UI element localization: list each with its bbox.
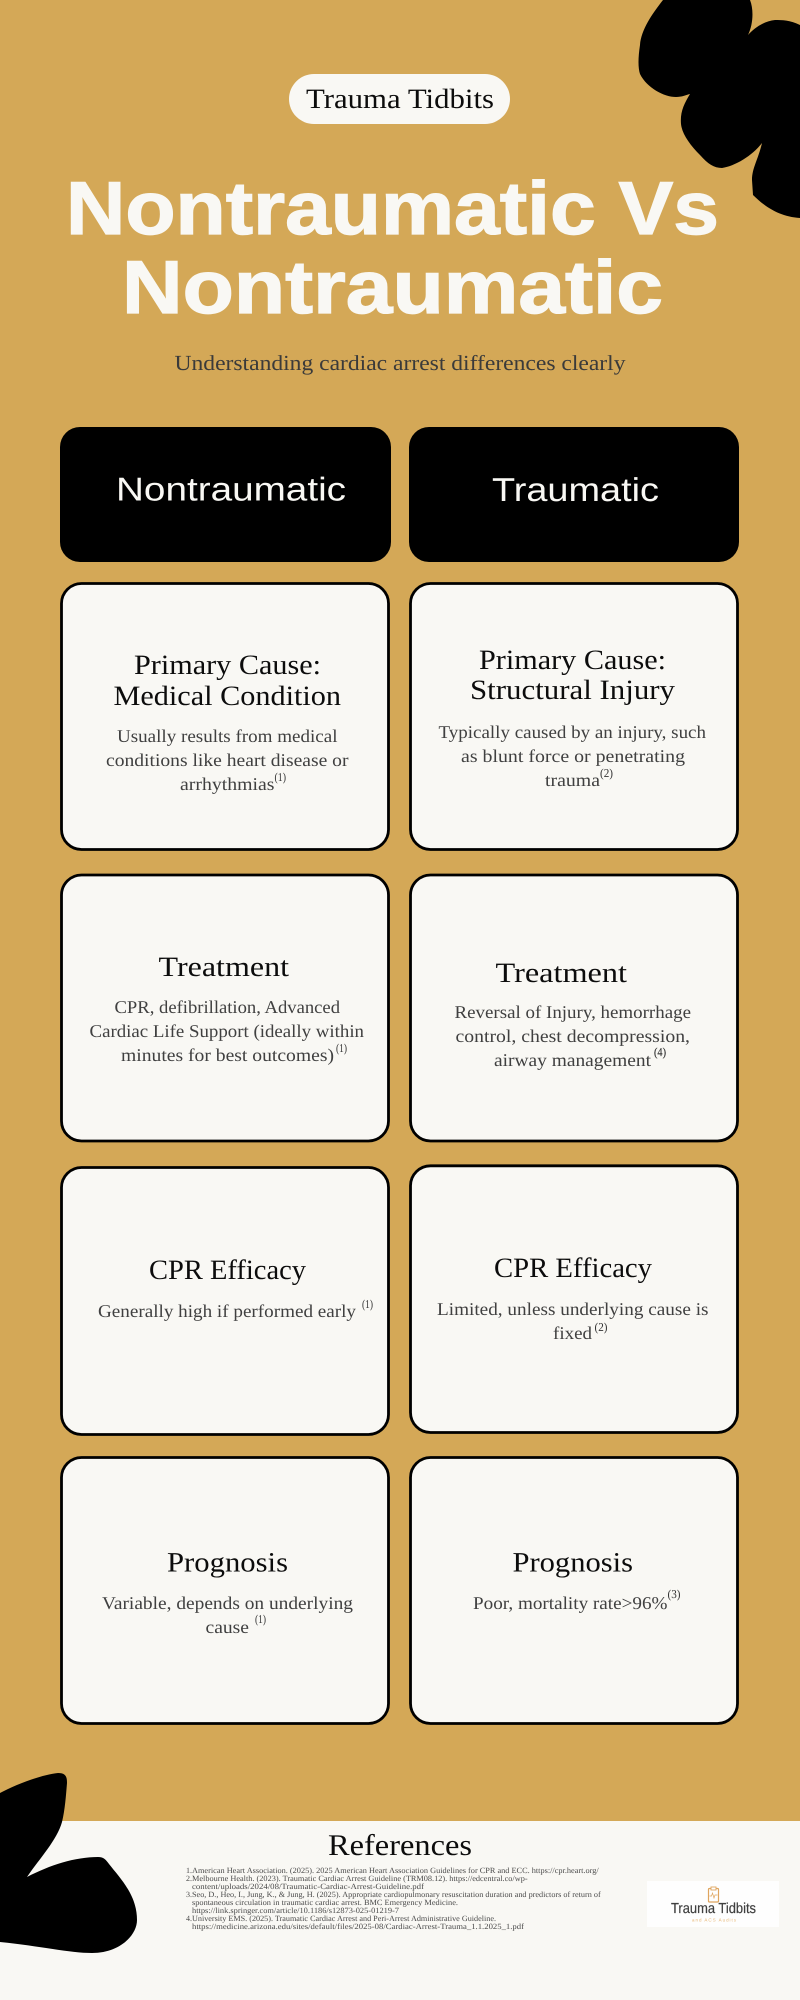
card: prognosis, nontraumatic: Prognosis	[167, 1548, 288, 1578]
title	[66, 166, 719, 329]
column header: Traumatic: Traumatic	[492, 471, 659, 508]
logo: Trauma Tidbits	[647, 1881, 779, 1927]
card: prognosis, traumatic: Prognosis	[512, 1548, 633, 1578]
card: prognosis, traumatic: Poor, mortality rate>96%	[473, 1593, 668, 1613]
card: treatment, traumatic: (4)	[654, 1045, 666, 1059]
card: CPR efficacy, traumatic: CPR Efficacy	[494, 1253, 652, 1284]
card: primary cause, nontraumatic: (1)	[274, 770, 286, 784]
card: primary cause, traumatic: Typically caused by an injury, such	[438, 722, 706, 742]
card: treatment, traumatic	[410, 875, 738, 1141]
card: treatment, traumatic: airway management	[494, 1050, 651, 1070]
card: primary cause, nontraumatic: Medical Condition	[114, 681, 341, 712]
card: treatment, nontraumatic: CPR, defibrillation, Advanced	[114, 997, 340, 1017]
decorative blob: bottom left	[0, 1773, 137, 1953]
card: CPR efficacy, nontraumatic: CPR Efficacy	[149, 1255, 306, 1286]
card: primary cause, traumatic: as blunt force or penetrating	[461, 746, 685, 766]
card: treatment, nontraumatic: minutes for best outcomes)	[121, 1045, 334, 1065]
logo: Trauma Tidbits: Trauma Tidbits	[671, 1901, 756, 1917]
card: prognosis, traumatic	[410, 1458, 738, 1724]
card: CPR efficacy, traumatic: fixed	[553, 1323, 592, 1343]
logo: Trauma Tidbits: and ACS Audits	[692, 1918, 737, 1922]
card: CPR efficacy, nontraumatic: (1)	[362, 1297, 373, 1311]
card: primary cause, traumatic: Structural Injury	[470, 675, 675, 706]
references list: spontaneous circulation in traumatic cardiac arrest. BMC Emergency Medicine.	[192, 1898, 458, 1907]
card: prognosis, traumatic: (3)	[668, 1587, 680, 1601]
card: prognosis, nontraumatic: cause	[206, 1617, 249, 1637]
card: CPR efficacy, nontraumatic	[62, 1168, 388, 1434]
card: CPR efficacy, traumatic: (2)	[594, 1320, 608, 1334]
references heading: References	[328, 1829, 472, 1862]
column header: Traumatic	[409, 427, 739, 562]
card: primary cause, traumatic: (2)	[600, 766, 613, 780]
card: treatment, nontraumatic: Cardiac Life Support (ideally within	[90, 1021, 364, 1041]
column header: Nontraumatic: Nontraumatic	[116, 470, 346, 508]
decorative blob: top right	[638, 0, 800, 218]
card: primary cause, nontraumatic: Usually results from medical	[117, 726, 338, 746]
references panel background	[0, 1821, 800, 2000]
references list: Seo, D., Heo, I., Jung, K., & Jung, H. (2025). Appropriate cardiopulmonary resuscitation duration and predictors of return of	[192, 1890, 601, 1899]
card: treatment, nontraumatic: Treatment	[158, 952, 289, 983]
badge: Trauma Tidbits	[289, 74, 510, 124]
references list: https://link.springer.com/article/10.1186/s12873-025-01219-7	[192, 1906, 399, 1915]
card: CPR efficacy, traumatic	[410, 1166, 738, 1432]
card: prognosis, nontraumatic	[62, 1458, 388, 1724]
card: primary cause, traumatic	[410, 584, 738, 850]
card: prognosis, nontraumatic: (1)	[255, 1612, 266, 1626]
card: primary cause, traumatic: trauma	[545, 770, 600, 790]
references list: American Heart Association. (2025). 2025 American Heart Association Guidelines for CPR and ECC. https://cpr.heart.org/	[192, 1866, 600, 1875]
references list: 1.	[186, 1866, 192, 1875]
card: primary cause, nontraumatic: conditions like heart disease or	[106, 750, 349, 770]
card: primary cause, nontraumatic: arrhythmias	[180, 774, 274, 794]
references list: 3.	[186, 1890, 192, 1899]
references list: 4.	[186, 1914, 192, 1923]
card: treatment, traumatic: control, chest decompression,	[456, 1026, 690, 1046]
card: treatment, nontraumatic	[62, 875, 388, 1141]
card: treatment, nontraumatic: (1)	[336, 1041, 347, 1055]
references list: University EMS. (2025). Traumatic Cardiac Arrest and Peri-Arrest Administrative Guideline.	[192, 1914, 496, 1923]
card: prognosis, nontraumatic: Variable, depends on underlying	[102, 1593, 353, 1613]
card: treatment, traumatic: Treatment	[496, 958, 627, 989]
subtitle: Understanding cardiac arrest differences clearly	[174, 351, 626, 375]
references list: https://medicine.arizona.edu/sites/default/files/2025-08/Cardiac-Arrest-Trauma_1.1.2025_1.pdf	[192, 1922, 524, 1931]
title: Nontraumatic Vs	[66, 166, 719, 250]
card: CPR efficacy, nontraumatic: Generally high if performed early	[98, 1301, 356, 1321]
column header: Nontraumatic	[60, 427, 391, 562]
references list: 2.	[186, 1874, 192, 1883]
badge: Trauma Tidbits: Trauma Tidbits	[306, 84, 494, 115]
card: primary cause, nontraumatic	[62, 584, 388, 850]
card: treatment, traumatic: Reversal of Injury, hemorrhage	[454, 1002, 691, 1022]
card: primary cause, traumatic: Primary Cause:	[479, 645, 666, 676]
card: primary cause, nontraumatic: Primary Cause:	[134, 650, 321, 681]
references list: Melbourne Health. (2023). Traumatic Cardiac Arrest Guideline (TRM08.12). https://edcentral.co/wp-	[192, 1874, 528, 1883]
references list: content/uploads/2024/08/Traumatic-Cardiac-Arrest-Guideline.pdf	[192, 1882, 424, 1891]
title: Nontraumatic	[122, 245, 663, 329]
card: CPR efficacy, traumatic: Limited, unless underlying cause is	[437, 1299, 708, 1319]
references list	[186, 1866, 601, 1931]
